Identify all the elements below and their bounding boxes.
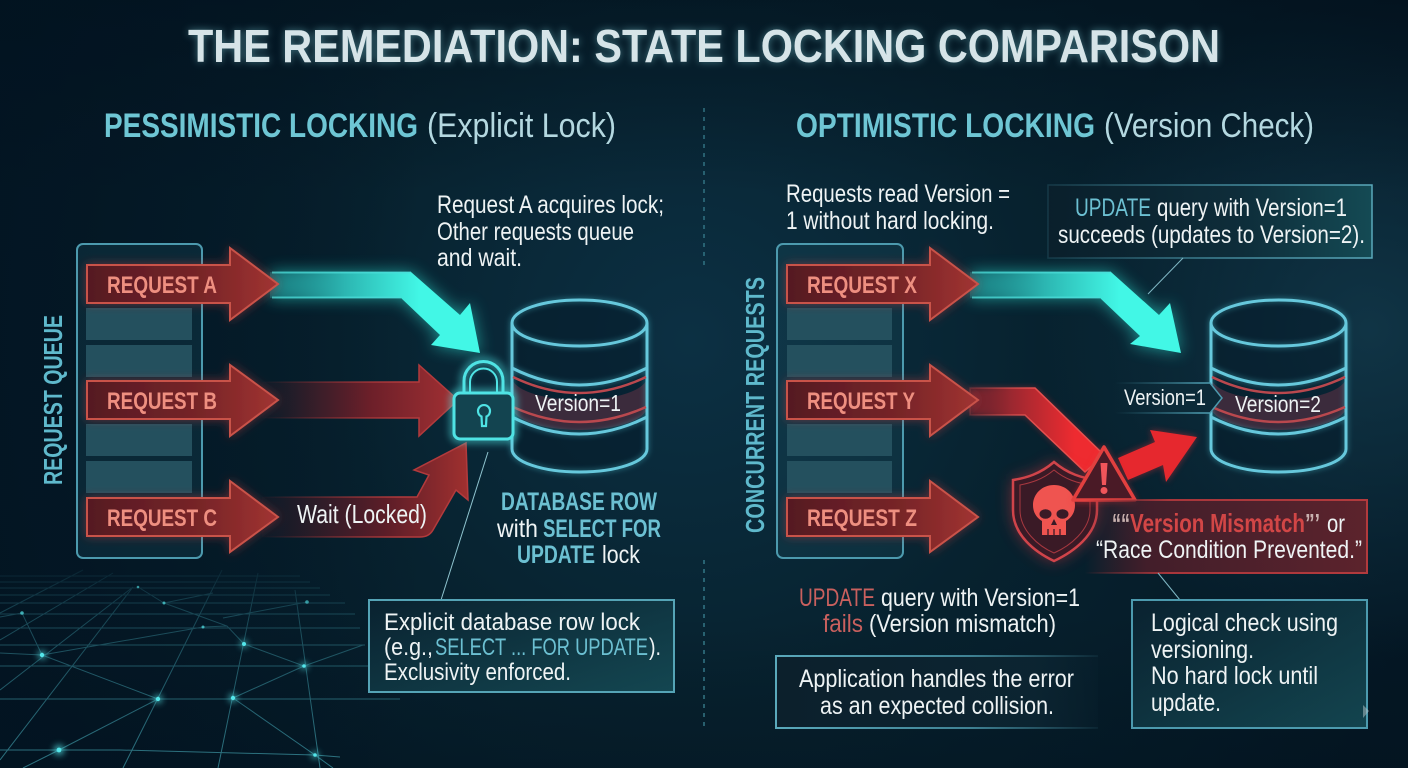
caption: lock behaviour: Other requests queue (437, 218, 634, 246)
corner sparkle (1363, 705, 1369, 718)
database: version 1 (512, 300, 647, 472)
callout: version mismatch: “Race Condition Prevented.” (1096, 536, 1362, 564)
request B (87, 365, 278, 436)
note: explicit row lock (369, 600, 674, 692)
skull (1033, 485, 1075, 535)
icon: shield with skull (1013, 462, 1097, 561)
note: application handles error: as an expected collision. (820, 692, 1054, 720)
caption: requests read version (786, 180, 1010, 235)
label: wait locked: Wait (Locked) (297, 499, 427, 529)
note: logical check: No hard lock until (1151, 662, 1318, 690)
request C (87, 481, 278, 552)
callout: version mismatch (1085, 500, 1367, 573)
note: update succeeds: query with Version=1 (1157, 194, 1347, 222)
caption: requests read version: 1 without hard locking. (786, 207, 994, 235)
title: THE REMEDIATION: STATE LOCKING COMPARISON (188, 20, 1220, 72)
arrow: request Y failure (red) (970, 388, 1197, 482)
icon: padlock (454, 361, 513, 439)
heading: pessimistic locking: (Explicit Lock) (427, 107, 616, 145)
caption: update fails: (Version mismatch) (869, 610, 1056, 638)
caption: requests read version: Requests read Version = (786, 180, 1010, 208)
queue slots (86, 308, 192, 493)
request Y: REQUEST Y (807, 388, 915, 415)
callout: version mismatch: ““ (1112, 508, 1130, 538)
request X (787, 248, 978, 320)
note: logical check: Logical check using (1151, 609, 1338, 637)
request A: REQUEST A (107, 272, 217, 299)
heading: optimistic locking (796, 107, 1314, 145)
note: update succeeds: UPDATE (1075, 194, 1151, 222)
leader line: mismatch to note (1158, 573, 1180, 600)
request slots (787, 308, 892, 493)
caption: database row: SELECT FOR (543, 515, 661, 543)
arrow: request X success (cyan) (970, 272, 1181, 353)
caption: database row (496, 488, 661, 569)
request A (87, 248, 278, 320)
request X: REQUEST X (807, 272, 917, 299)
callout: version mismatch: or (1327, 510, 1345, 538)
request B: REQUEST B (107, 388, 217, 415)
background network grid (0, 570, 400, 768)
request Y (787, 365, 978, 436)
note: application handles error (776, 656, 1098, 728)
note: explicit row lock: Explicit database row lock (384, 609, 641, 636)
network nodes (20, 586, 318, 758)
note: explicit row lock: (e.g., (384, 634, 433, 661)
leader line: success note (1148, 258, 1183, 294)
icon: warning triangle (1072, 445, 1137, 502)
caption: database row: DATABASE ROW (501, 488, 657, 516)
note: logical check (1132, 600, 1367, 728)
note: update succeeds (1048, 185, 1372, 258)
caption: update fails (799, 584, 1080, 638)
caption: lock behaviour (437, 191, 664, 272)
database: version 2: Version=2 (1235, 391, 1321, 417)
request Z (787, 481, 978, 552)
caption: database row: UPDATE (517, 541, 595, 569)
title: THE REMEDIATION: STATE LOCKING COMPARISON (188, 20, 1220, 72)
note: logical check: versioning. (1151, 636, 1254, 664)
note: explicit row lock: SELECT ... FOR UPDATE (435, 634, 648, 661)
caption: update fails: fails (823, 610, 863, 638)
queue label: REQUEST QUEUE (38, 315, 68, 485)
caption: update fails: UPDATE (799, 584, 875, 612)
heading: optimistic locking: OPTIMISTIC LOCKING (796, 107, 1095, 145)
tag: version 1 read: Version=1 (1124, 385, 1206, 410)
note: logical check: update. (1151, 689, 1221, 717)
note: explicit row lock: ). (649, 634, 661, 661)
callout: version mismatch: ”’ (1305, 508, 1320, 538)
caption: database row: lock (602, 541, 640, 569)
arrow: request C waiting (262, 443, 468, 537)
database: version 1: Version=1 (535, 390, 621, 416)
caption: lock behaviour: and wait. (437, 244, 522, 272)
request C: REQUEST C (107, 505, 217, 532)
note: explicit row lock: Exclusivity enforced. (384, 659, 571, 686)
queue container (77, 244, 202, 558)
leader line: lock to note (441, 452, 488, 600)
caption: update fails: query with Version=1 (881, 584, 1080, 612)
callout: version mismatch: Version Mismatch (1130, 508, 1305, 538)
database: version 2 (1211, 300, 1346, 472)
panel: pessimistic request queue (38, 244, 202, 558)
heading: pessimistic locking: PESSIMISTIC LOCKING (104, 107, 418, 145)
caption: lock behaviour: Request A acquires lock; (437, 191, 664, 219)
caption: database row: with (496, 515, 538, 543)
requests container (777, 244, 903, 558)
center divider (703, 108, 705, 726)
request Z: REQUEST Z (807, 505, 917, 532)
panel: concurrent requests (740, 244, 903, 558)
note: application handles error: Application handles the error (799, 665, 1074, 693)
arrow: request B blocked (262, 365, 458, 436)
heading: optimistic locking: (Version Check) (1104, 107, 1314, 145)
concurrent label: CONCURRENT REQUESTS (740, 277, 770, 533)
arrow: request A to lock (cyan) (270, 272, 480, 353)
